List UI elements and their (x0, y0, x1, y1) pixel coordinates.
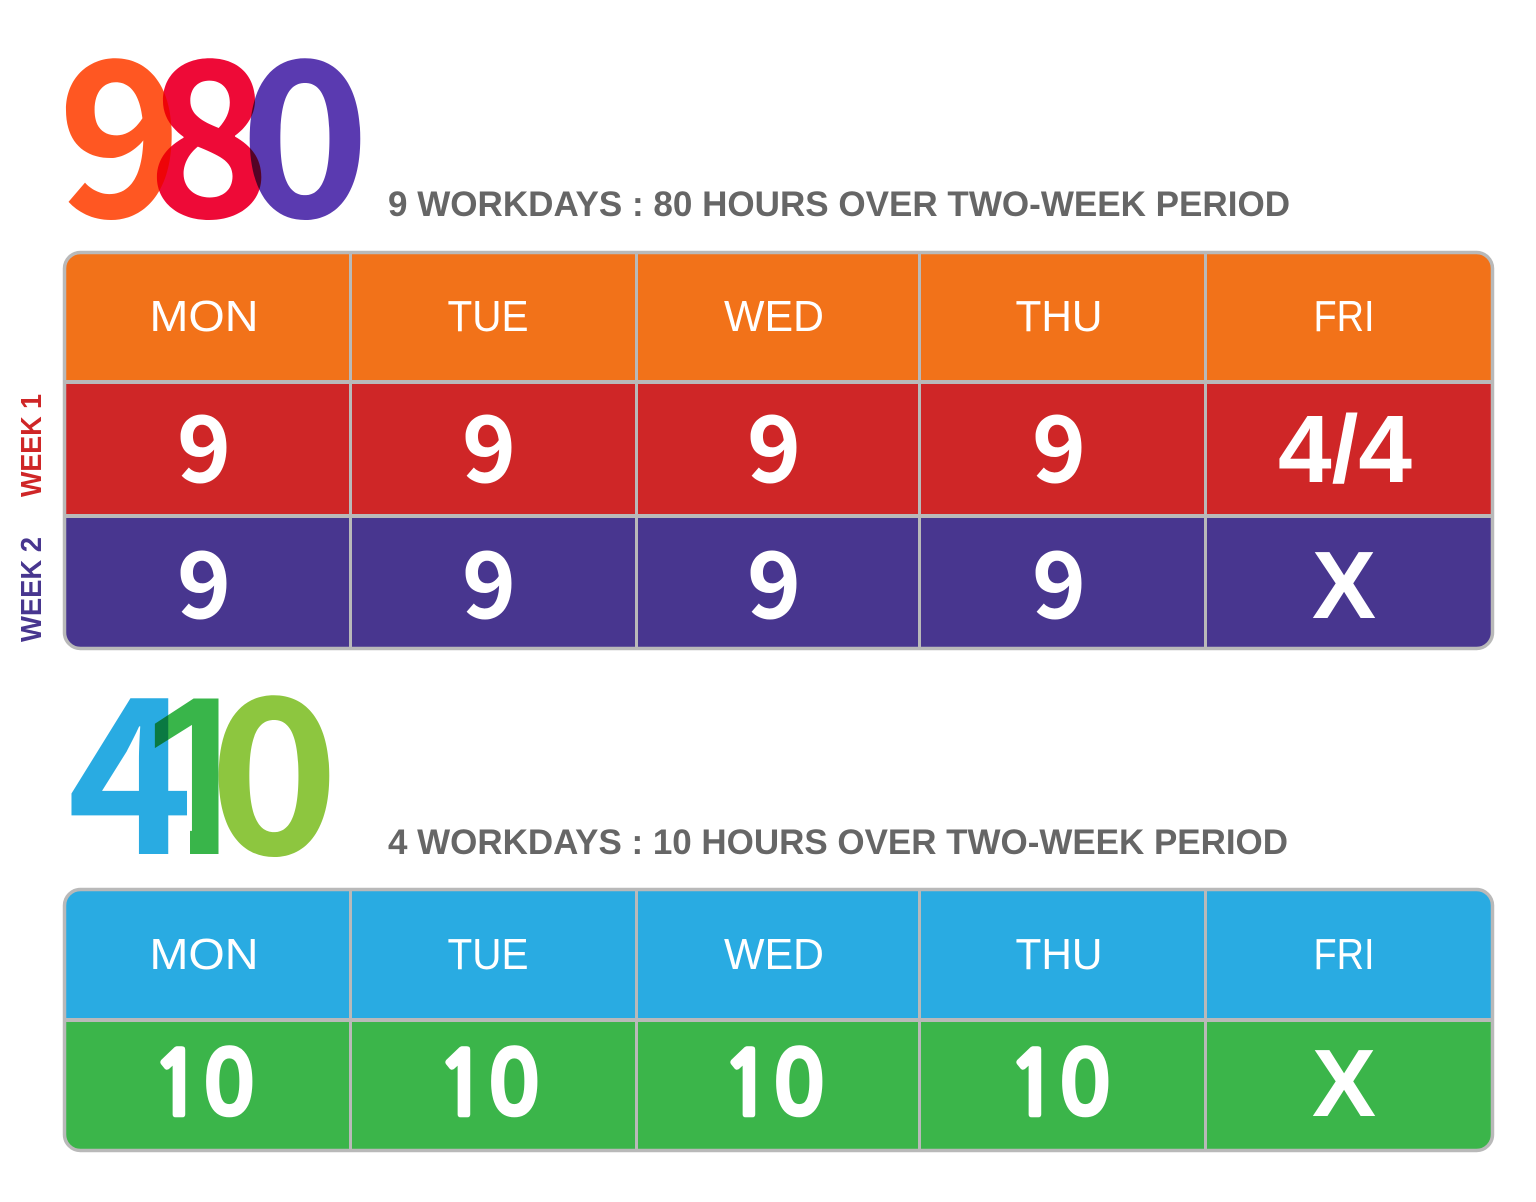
label: week 1: WEEK 1 (16, 394, 48, 497)
week 1 row: 9 (177, 376, 231, 509)
week 1 row: 9 (1032, 376, 1086, 509)
header row: THU (1016, 292, 1102, 341)
heading: 9/80 description: 9 WORKDAYS : 80 HOURS OVER TWO-WEEK PERIOD (388, 185, 1290, 224)
hours row: 10 (151, 1041, 255, 1129)
week labels (16, 394, 48, 642)
week 2 row (177, 512, 1376, 645)
week 1 row: 4/4 (1278, 396, 1412, 503)
header row: FRI (1314, 292, 1374, 341)
week 1 row: 9 (462, 376, 516, 509)
header row: MON (150, 292, 258, 341)
week 1 row (177, 376, 1412, 509)
logo: 4/10: 1 (140, 649, 264, 902)
header row: THU (1016, 930, 1102, 979)
header row: FRI (1314, 930, 1374, 979)
week 1 row: 9 (747, 376, 801, 509)
table: 9/80 schedule (63, 251, 1494, 650)
week 2 row: 9 (462, 512, 516, 645)
week 2 row: 9 (1032, 512, 1086, 645)
logo: 9/80 (58, 0, 370, 280)
week 2 row: 9 (747, 512, 801, 645)
label: week 2: WEEK 2 (16, 537, 48, 642)
hours row: X (1312, 1030, 1376, 1137)
header row: WED (724, 292, 824, 341)
table: 4/10 schedule (63, 888, 1494, 1152)
week 2 row: X (1312, 532, 1376, 639)
heading: 4/10 description: 4 WORKDAYS : 10 HOURS OVER TWO-WEEK PERIOD (388, 823, 1288, 862)
header row: TUE (448, 930, 528, 979)
hours row: 10 (436, 1041, 540, 1129)
header row (150, 292, 1374, 341)
header row: MON (150, 930, 258, 979)
hours row (151, 1030, 1376, 1137)
logo: 4/10: 4 (67, 604, 193, 917)
header row: WED (724, 930, 824, 979)
header row: TUE (448, 292, 528, 341)
week 2 row: 9 (177, 512, 231, 645)
logo: 4/10: 0 (209, 604, 339, 917)
hours row: 10 (1007, 1041, 1111, 1129)
header row (150, 930, 1374, 979)
logo: 4/10 (72, 695, 330, 857)
hours row: 10 (721, 1041, 825, 1129)
